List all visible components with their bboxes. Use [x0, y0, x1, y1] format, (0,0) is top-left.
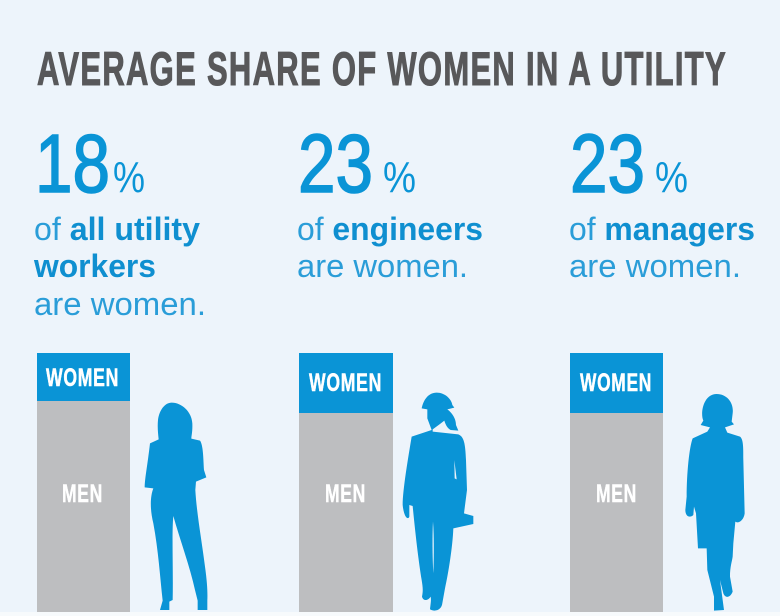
stacked bar: 23% women: MEN [596, 480, 637, 508]
description: all utility workers: are women. [34, 286, 206, 322]
description: all utility workers: workers [33, 248, 156, 284]
description: managers: of managers [569, 211, 755, 247]
stat: 23%: 23 [570, 117, 645, 210]
description: managers: are women. [569, 248, 741, 284]
description: all utility workers [33, 211, 206, 322]
column: all utility workers [33, 117, 207, 612]
stacked bar: 23% women: WOMEN [309, 369, 382, 397]
description: all utility workers: of all utility [34, 211, 200, 247]
description: engineers: are women. [297, 248, 468, 284]
stat: 18%: 18 [35, 117, 110, 210]
stat: 18%: % [113, 153, 145, 202]
description: engineers: of engineers [297, 211, 483, 247]
column: managers [569, 117, 755, 612]
icon: woman manager in dress [685, 394, 745, 611]
description: engineers [297, 211, 483, 284]
icon: woman in casual clothes [145, 403, 207, 610]
stacked bar: 23% women: WOMEN [580, 369, 652, 397]
description: managers [569, 211, 755, 284]
stat: 23%: % [383, 153, 416, 202]
stat: 23%: 23 [298, 117, 373, 210]
stacked bar: 23% women [570, 353, 663, 612]
stat: 23%: % [655, 153, 688, 202]
stacked bar: 18% women: WOMEN [46, 364, 119, 392]
stacked bar: 18% women [37, 353, 130, 612]
icon: woman engineer with hard hat [403, 393, 473, 611]
stacked bar: 23% women: MEN [325, 480, 366, 508]
stacked bar: 23% women [299, 353, 393, 612]
column: engineers [297, 117, 483, 612]
stacked bar: 18% women: MEN [62, 480, 103, 508]
